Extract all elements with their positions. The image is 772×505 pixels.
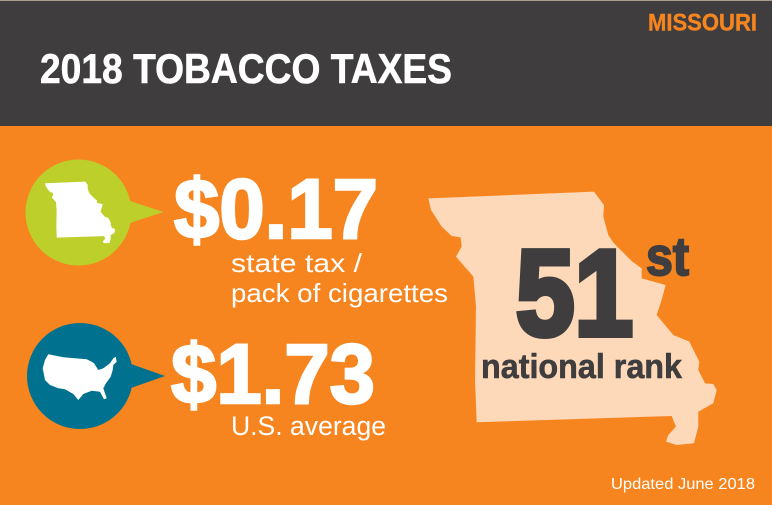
icon: United States bubble [27, 323, 165, 429]
state tax caption [231, 248, 448, 308]
US average caption: U.S. average [231, 411, 386, 441]
map: Missouri [428, 192, 717, 445]
rank ordinal: st [646, 227, 689, 287]
state tax caption: state tax / [231, 248, 363, 278]
header band [0, 0, 772, 126]
title: 2018 TOBACCO TAXES [40, 45, 452, 92]
state tax caption: pack of cigarettes [231, 278, 448, 308]
state tax figure: $0.17 [174, 162, 378, 256]
rank label: national rank [481, 348, 682, 386]
update note: Updated June 2018 [611, 476, 755, 493]
icon: Missouri state outline [45, 182, 115, 243]
icon: Missouri bubble [26, 160, 164, 266]
US average figure: $1.73 [171, 327, 375, 421]
state label: MISSOURI [648, 10, 757, 36]
rank number: 51 [516, 225, 633, 361]
icon: United States outline [43, 354, 117, 400]
